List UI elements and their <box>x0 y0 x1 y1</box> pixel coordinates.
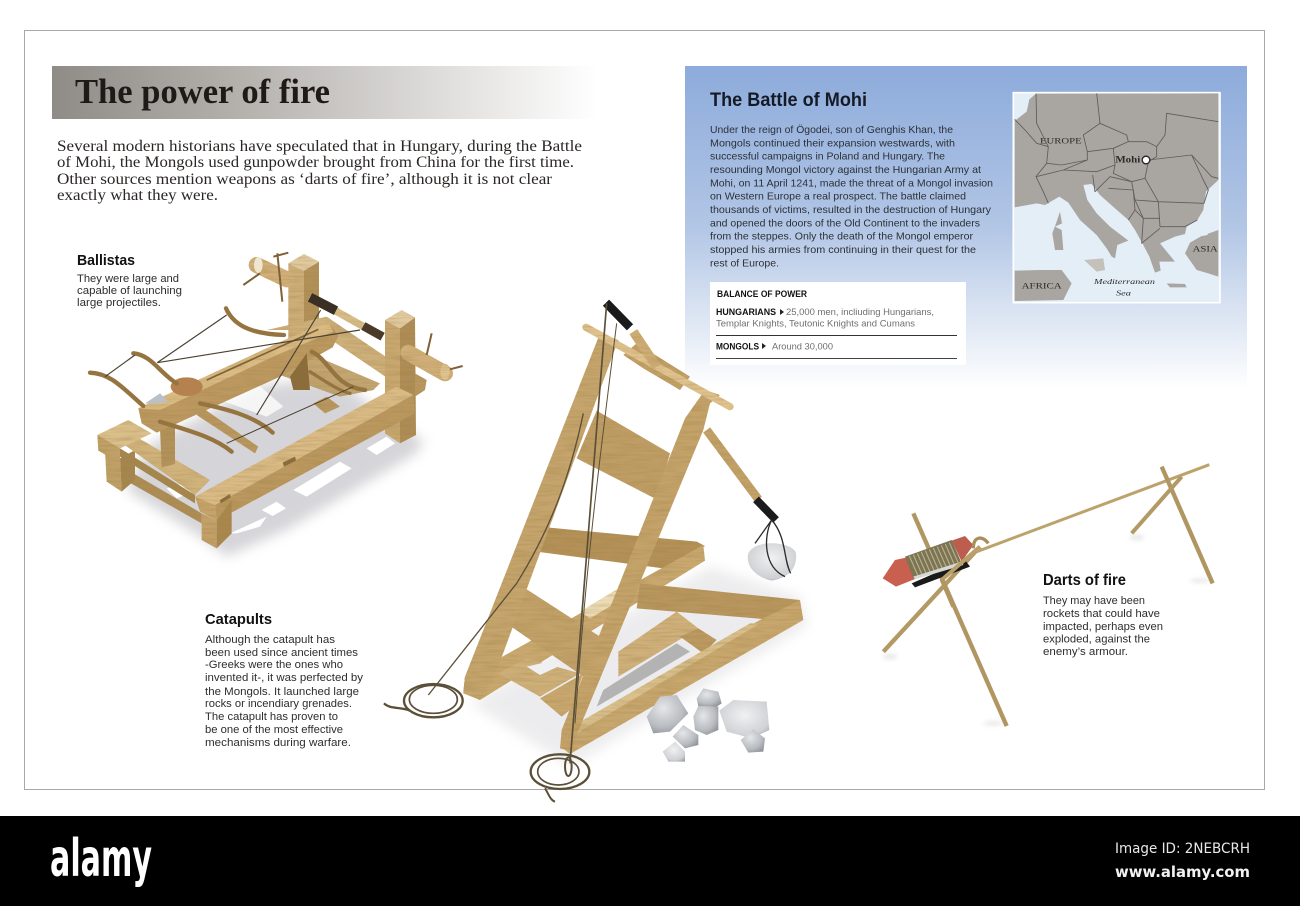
catapult platform <box>498 612 717 717</box>
panel: Battle of Mohi <box>685 66 1247 389</box>
footer image id: Image ID: 2NEBCRH <box>1115 841 1250 857</box>
catapult left leg <box>463 333 618 698</box>
illustration: darts of fire <box>883 465 1213 726</box>
Ballistas text: capable of launching <box>77 285 182 297</box>
map labels: Sea <box>1116 289 1131 298</box>
intro text: of Mohi, the Mongols used gunpowder brought from China for the first time. <box>57 154 574 171</box>
central support <box>160 425 175 467</box>
table: balance of power: Templar Knights, Teutonic Knights and Cumans <box>716 318 915 330</box>
back post <box>288 254 319 347</box>
body text: Mongols continued their expansion westwards, with <box>710 137 955 149</box>
body text: and opened the doors of the Old Continent to the invaders <box>710 217 980 229</box>
rocks <box>647 688 769 762</box>
intro text: Other sources mention weapons as ‘darts of fire’, although it is not clear <box>57 171 553 188</box>
Darts of fire text: Darts of fire <box>1043 572 1126 589</box>
front-left beam and leg <box>97 420 210 523</box>
body text: resounding Mongol victory against the Hungarian Army at <box>710 164 981 176</box>
rocket <box>883 536 988 587</box>
map labels <box>1022 136 1218 298</box>
Catapults text: be one of the most effective <box>205 724 343 736</box>
dart stand shadows <box>883 534 1210 726</box>
rear cross beam <box>262 317 420 397</box>
catapult rear base <box>463 527 705 700</box>
Catapults text: Although the catapult has <box>205 634 336 646</box>
front beam <box>195 387 415 548</box>
body text: from the steppes. Only the death of the Mongol emperor <box>710 231 973 243</box>
ballista timber <box>97 254 450 548</box>
map land: Europe <box>1015 93 1218 273</box>
sling stone <box>748 520 796 581</box>
Catapults text: -Greeks were the ones who <box>205 659 343 671</box>
map labels: AFRICA <box>1022 281 1062 290</box>
Catapults text: the Mongols. It launched large <box>205 686 359 698</box>
table: balance of power: 25,000 men, incliuding Hungarians, <box>786 307 934 318</box>
body text: stopped his armies from continuing in their quest for the <box>710 244 976 256</box>
Ballistas text <box>77 252 182 309</box>
map land: Turkey <box>1185 230 1218 277</box>
body text: on Western Europe a real prospect. The battle claimed <box>710 191 966 203</box>
Catapults text: The catapult has proven to <box>205 711 338 723</box>
body text <box>710 124 993 269</box>
Catapults text: mechanisms during warfare. <box>205 737 351 749</box>
intro text: Several modern historians have speculated that in Hungary, during the Battle <box>57 138 582 155</box>
heading: The Battle of Mohi: The Battle of Mohi <box>710 90 867 111</box>
rear stand <box>1162 467 1213 583</box>
table: balance of power: MONGOLS <box>716 342 759 352</box>
intro text: exactly what they were. <box>57 187 218 204</box>
body text: successful campaigns in Poland and Hungary. The <box>710 151 945 163</box>
front stand overlap <box>942 547 980 580</box>
table: balance of power: HUNGARIANS <box>716 307 776 318</box>
Catapults text: Catapults <box>205 611 272 628</box>
map labels: Mohi <box>1115 154 1141 164</box>
Darts of fire text: enemy’s armour. <box>1043 646 1128 658</box>
Catapults text <box>205 611 364 749</box>
footer logo: alamy <box>50 829 152 889</box>
rear right post <box>385 310 427 443</box>
windlass: cylinders <box>257 265 450 380</box>
footer band <box>0 816 1300 906</box>
long pole <box>977 465 1209 552</box>
illustration: catapult <box>384 303 807 802</box>
map labels: ASIA <box>1193 245 1218 254</box>
catapult timber <box>463 327 803 754</box>
illustration: ballista <box>90 253 463 557</box>
map borders <box>1015 93 1218 243</box>
table: balance of power: BALANCE OF POWER <box>717 289 807 299</box>
gap shadow in platform <box>597 643 690 707</box>
ballista stock <box>138 323 338 433</box>
Catapults text: rocks or incendiary grenades. <box>205 698 352 710</box>
table: balance of power: Around 30,000 <box>772 342 833 352</box>
Marmara <box>1192 232 1208 236</box>
title band: The power of fire <box>75 72 330 111</box>
catapult cross planks <box>502 411 670 677</box>
Ballistas text: They were large and <box>77 273 179 285</box>
Darts of fire text: exploded, against the <box>1043 634 1150 646</box>
map labels: EUROPE <box>1040 136 1082 145</box>
body text: Under the reign of Ögodei, son of Genghis Khan, the <box>710 124 953 136</box>
catapult right leg <box>560 390 720 752</box>
map islands <box>1052 212 1187 287</box>
footer url: www.alamy.com <box>1115 863 1250 881</box>
catapult axle and beam <box>586 327 758 499</box>
Ballistas text: large projectiles. <box>77 297 161 309</box>
Darts of fire text <box>1043 572 1163 658</box>
windlass details <box>243 253 463 369</box>
Catapults text: invented it-, it was perfected by <box>205 672 364 684</box>
table: balance of power <box>710 282 966 365</box>
intro text <box>57 138 582 204</box>
Darts of fire text: rockets that could have <box>1043 608 1160 620</box>
body text: rest of Europe. <box>710 257 779 269</box>
catapult ropes <box>384 303 617 802</box>
body text: Mohi, on 11 April 1241, made the threat of a Mongol invasion <box>710 177 993 189</box>
title band <box>52 66 598 119</box>
ballista strings <box>105 310 360 443</box>
catapult arm ends <box>606 303 776 520</box>
Darts of fire text: They may have been <box>1043 595 1145 607</box>
body text: thousands of victims, resulted in the destruction of Hungary <box>710 204 992 216</box>
ballista ground shadow <box>127 377 423 557</box>
front stand <box>913 513 1007 726</box>
map land: Africa <box>1015 270 1072 301</box>
stock details <box>145 329 318 503</box>
ballista bows <box>90 308 365 452</box>
catapult right base <box>561 583 803 754</box>
inner slats <box>197 397 340 453</box>
Catapults text: been used since ancient times <box>205 647 359 659</box>
catapult ground shadow <box>470 567 807 767</box>
page frame <box>24 30 1264 790</box>
Darts of fire text: impacted, perhaps even <box>1043 621 1163 633</box>
map of Europe <box>1013 93 1220 303</box>
map labels: Mediterranean <box>1093 277 1155 286</box>
Mohi marker <box>1142 156 1150 164</box>
Ballistas text: Ballistas <box>77 252 135 269</box>
